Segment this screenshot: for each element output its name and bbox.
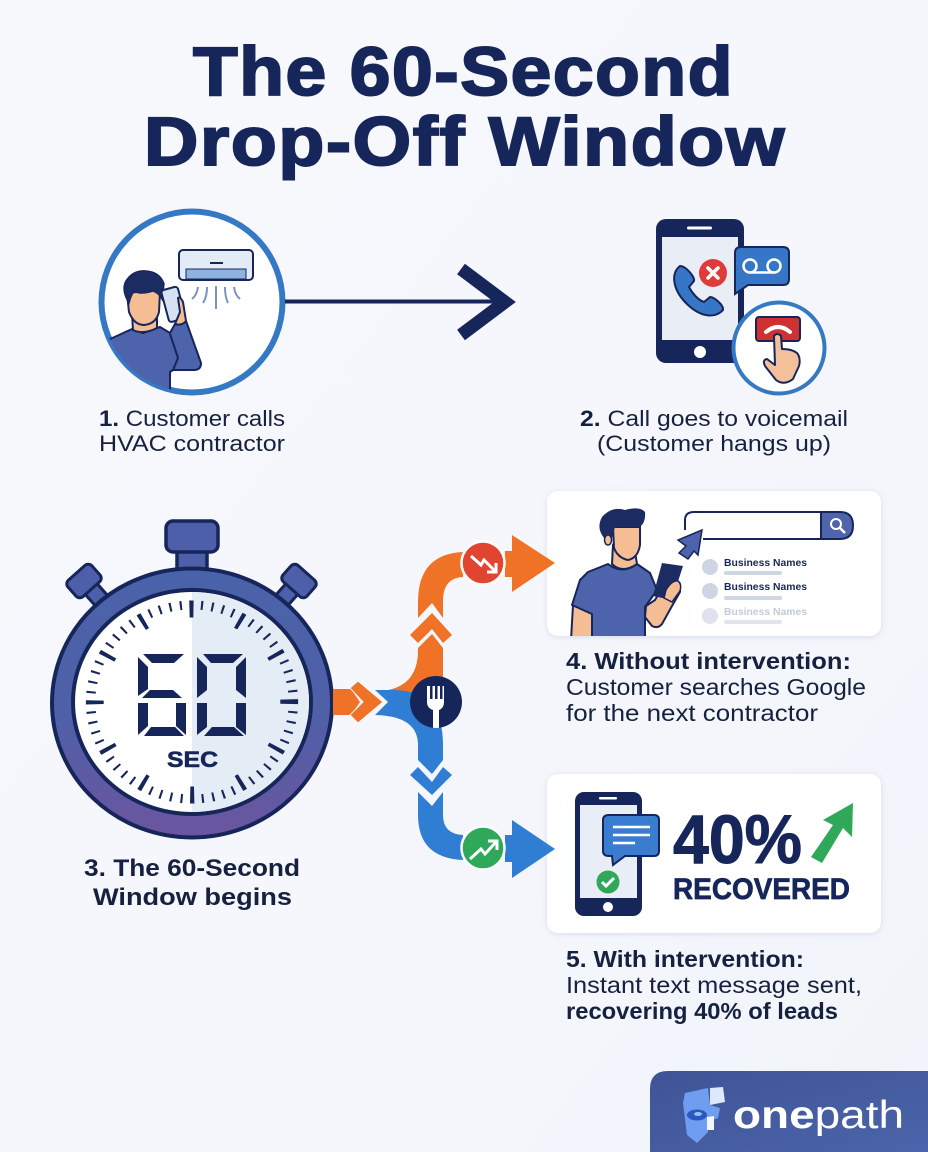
diagram: forking flow arrows — [333, 535, 555, 878]
label: step 4: Customer searches Google — [566, 674, 866, 700]
panel: with intervention recovered — [547, 774, 881, 933]
icon: upward trend badge — [462, 826, 504, 870]
label: step 5: 5. With intervention: — [566, 946, 804, 972]
title — [144, 33, 786, 180]
label: step 5 — [566, 946, 862, 1024]
arrow: blue branch down — [375, 690, 555, 878]
label: step 4 — [566, 648, 866, 726]
label: step 3 — [84, 855, 300, 911]
cursor arrow — [678, 530, 702, 559]
stopwatch right button — [268, 562, 318, 613]
icon: phone with voicemail and hang up — [656, 219, 824, 394]
icon: handset — [674, 266, 723, 315]
icon: hang up button — [734, 302, 824, 394]
title: The 60-Second — [193, 33, 734, 110]
label: step 2: 2. Call goes to voicemail — [580, 406, 848, 431]
icon: 60 second stopwatch — [52, 521, 332, 838]
arrow: orange branch up — [388, 535, 555, 712]
person searching on phone — [571, 508, 683, 640]
digits 60 — [138, 654, 246, 736]
search results list — [702, 557, 807, 624]
stopwatch crown — [166, 521, 218, 572]
search results list: Business Names — [724, 581, 807, 593]
label: step 5: recovering 40% of leads — [566, 998, 838, 1024]
person with phone — [100, 271, 201, 392]
label: step 3: 3. The 60-Second — [84, 855, 300, 882]
stopwatch left button — [65, 562, 115, 613]
label: step 1: 1. Customer calls — [99, 406, 285, 431]
logo mark — [683, 1087, 725, 1143]
stat: 40% recovered: RECOVERED — [673, 873, 850, 906]
label: step 4: for the next contractor — [566, 700, 818, 726]
logo wordmark: one path — [733, 1094, 904, 1137]
panel: without intervention search — [547, 491, 881, 640]
icon: fork decision point — [410, 676, 462, 728]
logo: onepath — [650, 1071, 928, 1152]
label: step 4: 4. Without intervention: — [566, 648, 851, 674]
arrow: step 1 to step 2 — [285, 269, 505, 335]
title: Drop-Off Window — [144, 103, 786, 180]
label: step 2 — [580, 406, 848, 456]
arrow: stub from stopwatch — [333, 681, 383, 723]
stat: 40% recovered: 40% — [673, 801, 802, 878]
label: step 2: (Customer hangs up) — [597, 431, 831, 456]
icon: green up arrow — [811, 803, 853, 863]
label: step 1 — [99, 406, 285, 456]
label: step 3: Window begins — [93, 884, 292, 911]
search results list: Business Names — [724, 606, 807, 618]
dial tick marks — [91, 605, 293, 799]
SEC label: SEC — [167, 747, 218, 772]
icon: customer calling HVAC contractor — [100, 212, 282, 392]
icon: phone with text message — [575, 792, 659, 916]
search bar — [685, 512, 853, 539]
stat: 40% recovered — [673, 801, 850, 906]
label: step 5: Instant text message sent, — [566, 972, 862, 998]
icon: voicemail bubble — [735, 247, 789, 294]
search results list: Business Names — [724, 557, 807, 569]
icon: downward trend badge — [462, 542, 504, 584]
label: step 1: HVAC contractor — [99, 431, 285, 456]
icon: air conditioner — [179, 250, 253, 309]
icon: missed call badge — [699, 259, 727, 287]
